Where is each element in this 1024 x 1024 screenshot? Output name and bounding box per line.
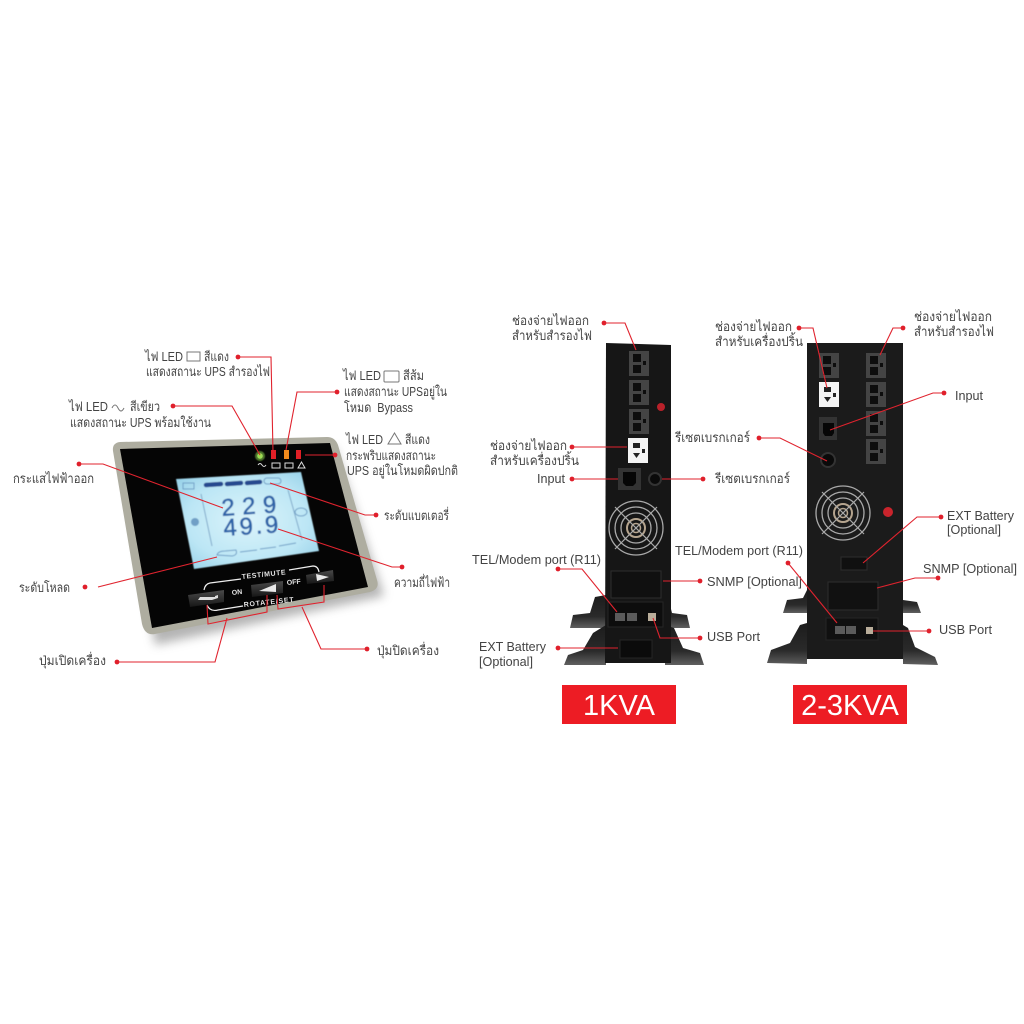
callout: EXT battery (479, 639, 618, 669)
panel face (120, 443, 368, 628)
LCD fan icon (191, 518, 199, 526)
callout: TEL port: TEL/Modem port (R11) (472, 552, 601, 567)
callout: breaker reset (674, 430, 827, 461)
callout: TEL port (675, 543, 837, 623)
callout: printer socket: ช่องจ่ายไฟออก (715, 319, 792, 334)
callout: USB: USB Port (939, 622, 992, 637)
stand feet (564, 595, 704, 665)
callout: battery level: ระดับแบตเตอรี่ (384, 507, 449, 523)
callout: alarm LED (305, 432, 458, 479)
stand feet (767, 590, 938, 665)
callout: EXT battery: EXT Battery (947, 508, 1014, 523)
callout: printer socket (490, 438, 627, 468)
fan (609, 501, 663, 555)
callout: output current (13, 462, 223, 508)
button labels: TEST/MUTE (241, 569, 286, 581)
load level bars (217, 543, 296, 556)
callout: breaker reset: รีเซตเบรกเกอร์ (714, 471, 790, 486)
button labels: ON (231, 589, 243, 597)
output sockets (629, 351, 649, 434)
panel: 1KVA UPS rear (564, 343, 704, 665)
comm ports (826, 618, 878, 640)
callout: printer socket: สำหรับเครื่องปริ้น (715, 332, 803, 349)
badge: 1KVA: 1KVA (583, 690, 656, 722)
callout: EXT battery: [Optional] (479, 654, 533, 669)
callout: SNMP (877, 561, 1017, 588)
printer socket (628, 438, 648, 463)
tower body (605, 343, 671, 663)
callout: backup socket: สำหรับสำรองไฟ (914, 324, 994, 339)
fan (816, 486, 870, 540)
LED indicators (255, 450, 305, 468)
breaker (821, 453, 835, 467)
callout: printer socket: ช่องจ่ายไฟออก (490, 438, 567, 453)
badge: 2-3KVA: 2-3KVA (801, 690, 900, 722)
output sockets (866, 353, 886, 464)
button labels: OFF (286, 578, 302, 587)
breaker (649, 473, 661, 485)
callout: breaker reset (662, 471, 790, 486)
callout: battery LED: แสดงสถานะ UPS สำรองไฟ (146, 364, 270, 379)
panel: 2-3KVA UPS rear (767, 343, 938, 665)
callout: battery level (270, 483, 449, 523)
LCD screen (176, 472, 319, 569)
callout: TEL port: TEL/Modem port (R11) (675, 543, 803, 558)
SNMP slot (828, 582, 878, 610)
callout: EXT battery: [Optional] (947, 522, 1001, 537)
callout: printer socket: สำหรับเครื่องปริ้น (490, 451, 579, 468)
button labels: ROTATE/SET (243, 597, 295, 609)
LCD side rules (201, 490, 302, 546)
callout: power off button: ปุ่มปิดเครื่อง (377, 642, 439, 659)
callout: orange LED (286, 368, 447, 450)
panel: LCD control panel (113, 437, 384, 645)
input socket (819, 417, 837, 440)
callout: USB (873, 622, 992, 637)
callout: input: Input (537, 471, 565, 486)
callout: battery LED: สีแดง (204, 349, 229, 364)
callout: frequency (278, 529, 450, 590)
voltage reading: 229 (221, 491, 277, 522)
callout: input: Input (955, 388, 983, 403)
printer socket (819, 382, 839, 407)
brand logo (883, 507, 893, 517)
callout: green LED (68, 399, 260, 455)
callout: breaker reset: รีเซตเบรกเกอร์ (674, 430, 750, 445)
EXT battery slot (841, 557, 867, 570)
callout: USB: USB Port (707, 629, 760, 644)
buttons (188, 570, 334, 607)
callout: orange LED: สีส้ม (403, 368, 424, 383)
callout: power off button (277, 585, 439, 659)
callout: alarm LED: ไฟ LED (345, 432, 383, 447)
EXT battery slot (620, 640, 652, 658)
callout: green LED: แสดงสถานะ UPS พร้อมใช้งาน (70, 415, 211, 430)
comm ports (608, 602, 663, 627)
callout: load level (19, 557, 217, 595)
frequency reading: 49.9 (223, 511, 279, 542)
callout: EXT battery: EXT Battery (479, 639, 546, 654)
panel shadow (125, 448, 384, 645)
callout: orange LED: แสดงสถานะ UPSอยู่ใน (344, 384, 447, 400)
LCD load icon (295, 508, 307, 516)
callouts: 2-3KVA (674, 309, 1017, 637)
callout: orange LED: ไฟ LED (342, 368, 381, 383)
callout: backup socket: สำหรับสำรองไฟ (512, 328, 592, 343)
callout: battery LED: ไฟ LED (144, 349, 183, 364)
callout: green LED: ไฟ LED (68, 399, 108, 414)
callout: battery LED (144, 349, 273, 452)
tower body (807, 343, 903, 659)
brand logo (657, 403, 665, 411)
printer-side output socket (819, 353, 839, 378)
callout: power on button (39, 595, 267, 669)
callout: printer socket (715, 319, 827, 388)
input socket (618, 468, 641, 490)
callout: SNMP (663, 574, 802, 589)
battery level bars (183, 478, 281, 489)
callout: input (830, 388, 983, 430)
callout: green LED: สีเขียว (130, 399, 160, 414)
callouts: LCD panel (13, 349, 458, 669)
callout: backup socket: ช่องจ่ายไฟออก (512, 313, 589, 328)
callout: alarm LED: กระพริบแสดงสถานะ (346, 448, 436, 463)
callout: alarm LED: สีแดง (405, 432, 430, 447)
callout: SNMP: SNMP [Optional] (707, 574, 802, 589)
callout: orange LED: โหมด Bypass (344, 400, 413, 415)
badge: 1KVA (562, 685, 676, 724)
callout: EXT battery (863, 508, 1014, 563)
callout: power on button: ปุ่มเปิดเครื่อง (39, 652, 106, 669)
callout: USB (653, 618, 760, 644)
callouts: 1KVA (472, 313, 802, 669)
callout: alarm LED: UPS อยู่ในโหมดผิดปกติ (347, 463, 458, 479)
button labels (231, 569, 302, 609)
callout: output current: กระแสไฟฟ้าออก (13, 471, 94, 486)
callout: SNMP: SNMP [Optional] (923, 561, 1017, 576)
callout: input (537, 471, 618, 486)
white bracket lines (204, 566, 319, 610)
callout: load level: ระดับโหลด (19, 580, 70, 595)
callout: backup socket (512, 313, 636, 350)
callout: frequency: ความถี่ไฟฟ้า (394, 574, 450, 590)
callout: TEL port (472, 552, 617, 612)
callout: backup socket: ช่องจ่ายไฟออก (914, 309, 992, 324)
SNMP slot (611, 571, 661, 598)
callout: backup socket (880, 309, 994, 355)
panel bezel (113, 437, 378, 634)
